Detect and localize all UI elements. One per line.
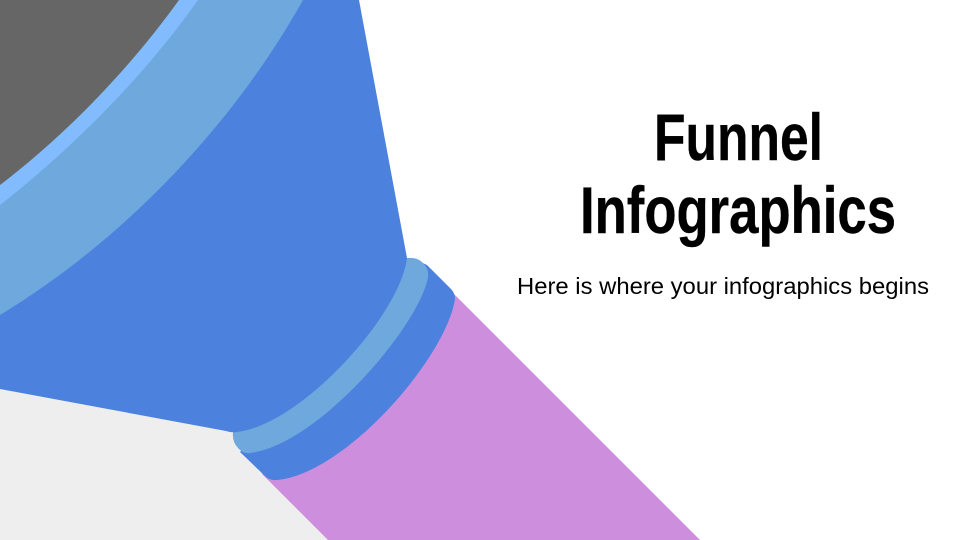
title line 1: Funnel — [654, 100, 823, 174]
panel: grey floor shape — [0, 388, 328, 540]
funnel neck outer ring — [240, 258, 455, 480]
funnel illustration — [0, 0, 455, 480]
subtitle: Here is where your infographics begins — [517, 273, 929, 299]
funnel neck light band — [233, 258, 428, 453]
funnel body — [0, 0, 407, 432]
funnel dark opening — [0, 0, 179, 185]
panel: purple funnel beam — [262, 290, 700, 540]
funnel bright rim — [0, 0, 198, 205]
funnel light ring — [0, 0, 303, 315]
title — [580, 100, 896, 247]
